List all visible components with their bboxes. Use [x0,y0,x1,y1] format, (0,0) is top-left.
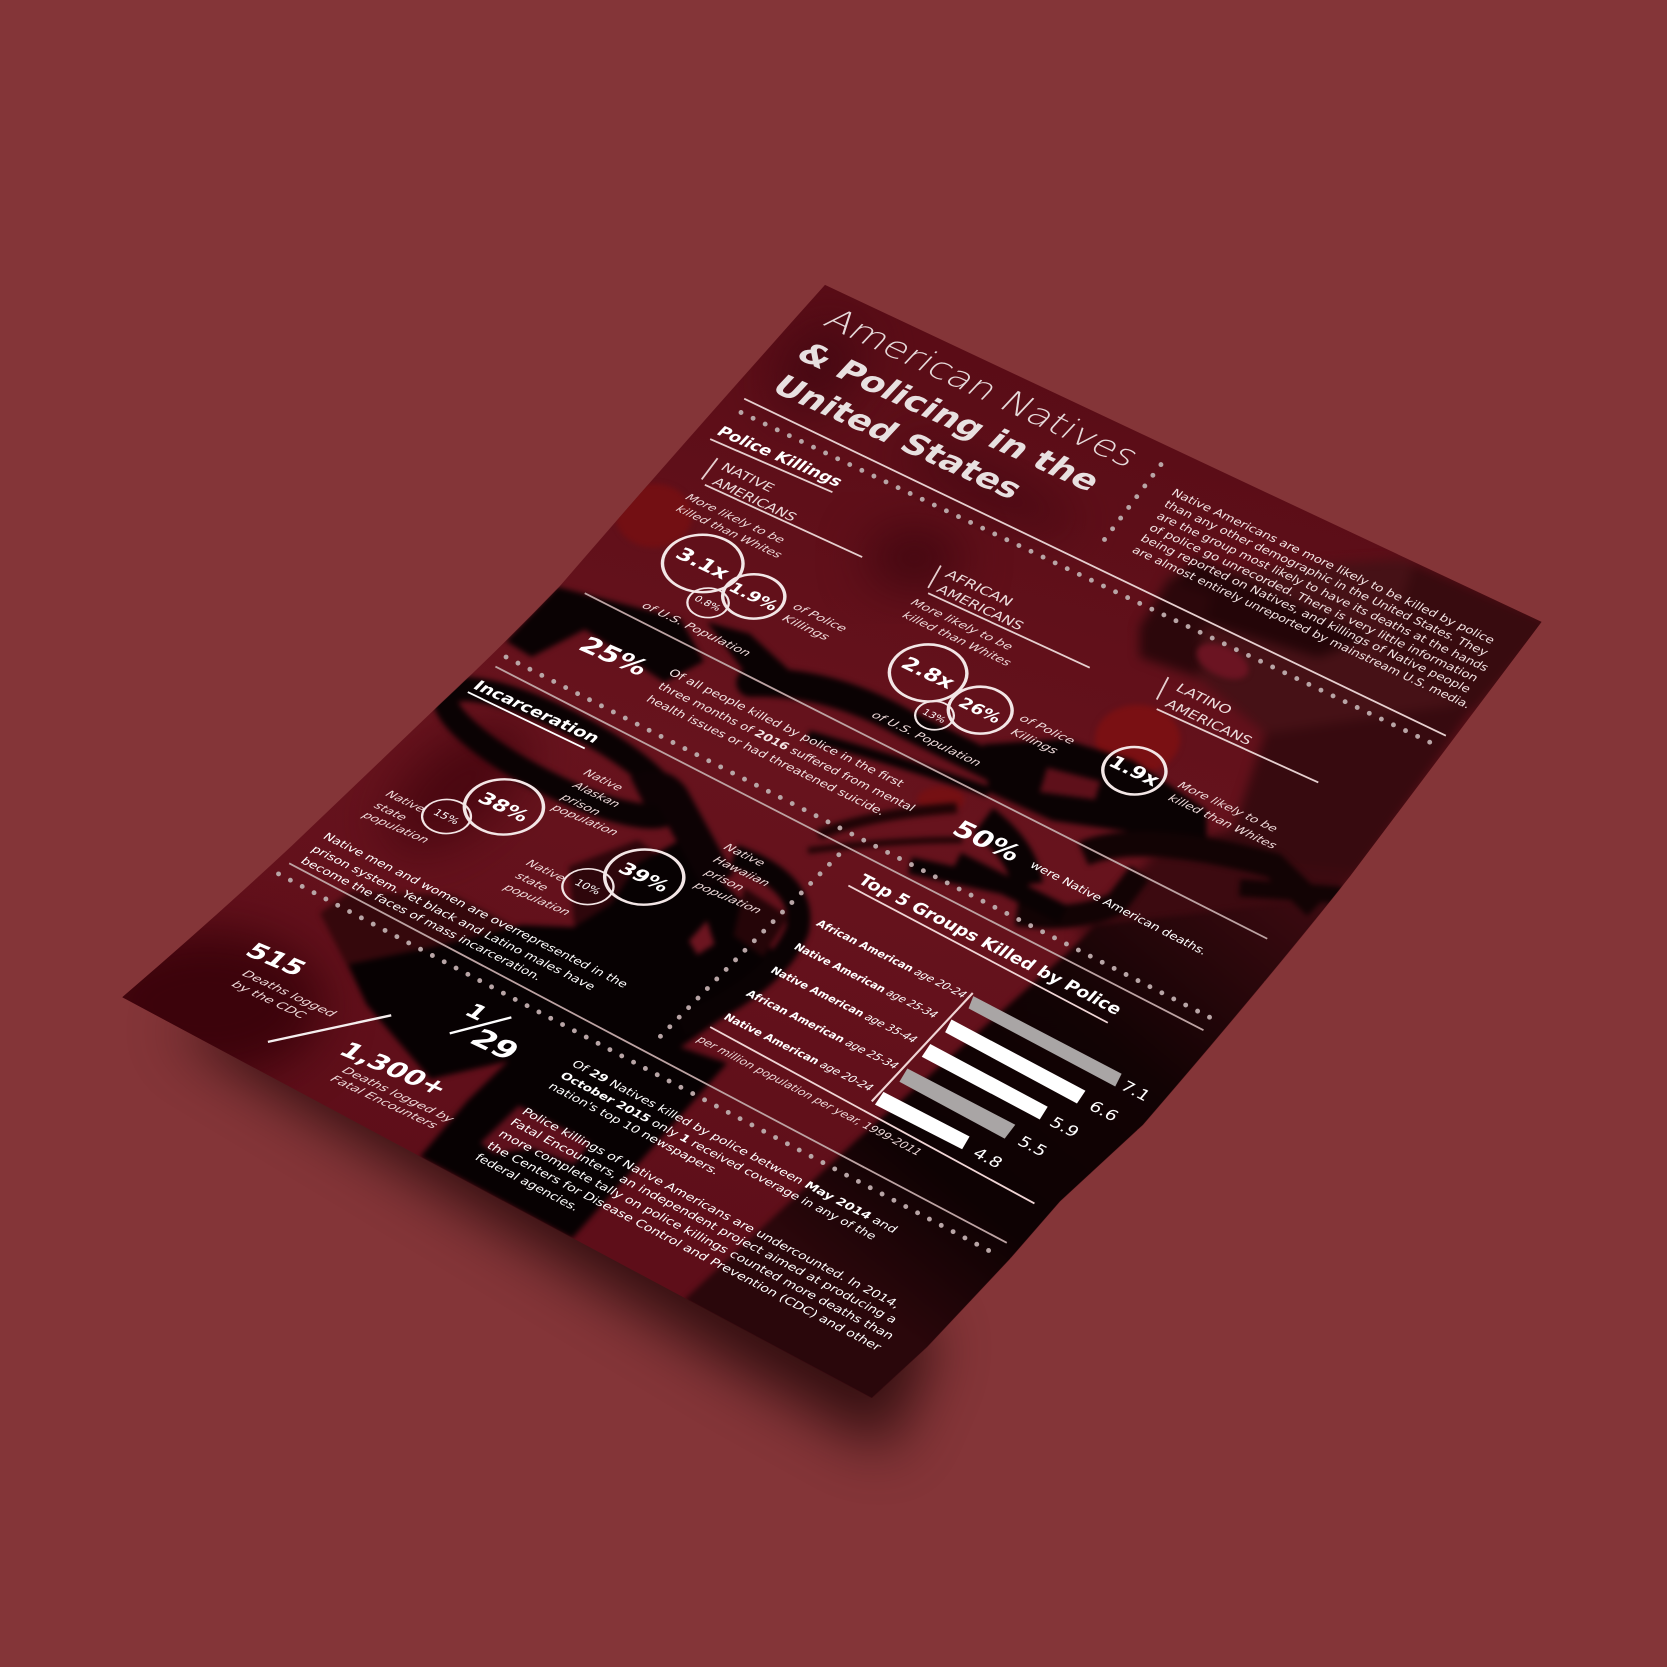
stat: 515 vs 1300 deaths: by the CDC [229,978,310,1021]
panel: native alaskan incarceration [358,767,626,845]
title: American Natives [816,302,1147,474]
intro paragraph: of police go unrecorded. There is very little information [1146,521,1481,684]
callout: 25 percent: health issues or had threatened suicide. [643,693,888,818]
panel: native alaskan incarceration: state [371,800,410,823]
panel: latino americans: LATINO [1172,681,1235,718]
undercount paragraph: federal agencies. [472,1151,582,1213]
panel: latino americans: 1.9x [1104,752,1164,790]
panel: native hawaiian incarceration: 39% [613,858,675,896]
panel: latino americans [1091,677,1318,851]
news coverage paragraph: Of 29 Natives killed by police between May 2014 and [569,1058,901,1235]
panel: african americans: More likely to be [908,596,1016,653]
stat: 515 vs 1300 deaths [229,939,457,1131]
undercount paragraph: more complete tally on police killings counted more deaths than [496,1128,897,1342]
panel: native americans: 1.9% [724,580,782,615]
incarceration paragraph: prison system. Yet black and Latino males have [308,843,598,992]
stat: 515 vs 1300 deaths: Deaths logged by [339,1064,457,1125]
section heading: incarceration: Incarceration [469,678,604,747]
panel: native americans: Killings [779,612,833,643]
panel: native americans: More likely to be [683,491,788,546]
panel: latino americans: AMERICANS [1162,697,1255,748]
panel: native hawaiian incarceration: Native [523,857,569,884]
title divider lines [741,399,1446,747]
chart: top 5 groups killed by police: Native American age 35-44 [768,964,920,1045]
panel: african americans: 13% [920,708,948,725]
chart: top 5 groups killed by police [694,871,1155,1203]
chart: top 5 groups killed by police: Top 5 Groups Killed by Police [854,871,1126,1019]
undercount paragraph: Police killings of Native Americans are undercounted. In 2014, [519,1105,903,1311]
infographic mockup [122,285,1542,1470]
panel: native americans: killed than Whites [673,503,785,560]
panel: african americans: of U.S. Population [869,709,984,769]
panel: african americans: of Police [1017,712,1078,747]
panel: native hawaiian incarceration: 10% [572,877,604,897]
intro paragraph [1129,486,1498,711]
chart: top 5 groups killed by police: Native American age 25-34 [791,941,941,1021]
poster page [122,285,1542,1398]
panel: native americans: AMERICANS [709,476,800,524]
callout: 25 percent [572,632,918,818]
panel: native americans: of Police [790,601,850,634]
chart: top 5 groups killed by police: 6.6 [1085,1097,1123,1125]
panel: native alaskan incarceration: Native [581,767,626,793]
panel: native americans: NATIVE [717,461,777,495]
panel: native hawaiian incarceration: prison [701,866,747,893]
section heading: police killings: Police Killings [712,424,847,490]
panel: native alaskan incarceration: population [358,809,432,845]
panel: african americans: Killings [1008,726,1061,756]
chart: top 5 groups killed by police: African American age 25-34 [743,987,901,1072]
panel: native hawaiian incarceration [500,839,773,918]
callout: 50 percent [946,816,1210,957]
undercount paragraph: Fatal Encounters, an independent project aimed at producing a [507,1116,900,1326]
panel: native alaskan incarceration: 15% [430,807,462,827]
panel: latino americans: More likely to be [1175,779,1281,834]
stat: 1 of 29: 29 [463,1024,526,1066]
chart: top 5 groups killed by police: African American age 20-24 [814,917,970,1001]
panel: native alaskan incarceration: 38% [473,788,535,826]
panel: african americans [869,566,1090,769]
title: United States [764,369,1031,506]
panel: native hawaiian incarceration: Hawaiian [710,854,773,889]
panel: native alaskan incarceration: population [548,801,622,838]
incarceration paragraph: become the faces of mass incarceration. [298,855,545,983]
chart: top 5 groups killed by police: per million population per year, 1999-2011 [694,1033,925,1158]
chart: top 5 groups killed by police: Native American age 20-24 [721,1011,876,1094]
callout: 25 percent: Of all people killed by police in the first [666,667,907,789]
chart: top 5 groups killed by police: 7.1 [1117,1077,1155,1104]
panel: native hawaiian incarceration: population [690,879,765,916]
chain photograph [90,302,1552,1419]
news coverage paragraph: nation's top 10 newspapers. [546,1080,723,1177]
chart: top 5 groups killed by police: 5.5 [1014,1132,1051,1160]
panel: african americans: AFRICAN [942,568,1016,609]
intro paragraph: are almost entirely unreported by mainstream U.S. media. [1129,544,1474,711]
intro paragraph: than any other demographic in the United States. They [1161,498,1491,658]
stat: 515 vs 1300 deaths: Deaths logged [239,968,340,1020]
intro paragraph: Native Americans are more likely to be killed by police [1169,486,1498,646]
panel: native americans: 0.8% [691,594,723,613]
title: & Policing in the [788,336,1109,498]
panel: african americans: 26% [954,695,1005,727]
panel: native alaskan incarceration: prison [557,791,604,818]
stat: 515 vs 1300 deaths: 515 [239,939,312,981]
callout: 25 percent: three months of 2016 suffered from mental [655,680,918,814]
incarceration paragraph: Native men and women are overrepresented in the [320,830,631,990]
panel: native americans [639,458,862,659]
stat: 1 of 29 [450,999,526,1066]
panel: native americans: of U.S. Population [639,600,754,659]
panel: native alaskan incarceration: Alaskan [569,779,623,810]
panel: native americans: 3.1x [671,544,735,583]
intro paragraph: being reported on Natives, and killings of Native people [1138,532,1474,695]
panel: african americans: killed than Whites [900,609,1014,668]
news coverage paragraph: October 2015 only 1 received coverage in any of the [557,1070,880,1242]
chart: top 5 groups killed by police: 5.9 [1046,1113,1083,1141]
panel: native alaskan incarceration: Native [383,788,428,815]
rule [585,593,1267,939]
callout: 50 percent: 50% [946,816,1027,867]
stat: 515 vs 1300 deaths: 1,300+ [333,1038,454,1101]
panel: native hawaiian incarceration: Native [721,841,768,869]
chart: top 5 groups killed by police: 4.8 [969,1144,1007,1171]
panel: latino americans: killed than Whites [1166,792,1280,851]
panel: native hawaiian incarceration: state [513,870,551,893]
section dividers [279,657,1212,1255]
callout: 50 percent: were Native American deaths. [1027,859,1210,957]
stat: 515 vs 1300 deaths: Fatal Encounters [328,1073,441,1131]
stat: 1 of 29: 1 [459,999,494,1025]
intro paragraph: are the group most likely to have its deaths at the hands [1154,510,1491,674]
panel: native hawaiian incarceration: population [500,881,574,918]
page shadow [170,1010,936,1451]
panel: african americans: AMERICANS [933,583,1027,633]
panel: african americans: 2.8x [896,653,960,693]
callout: 25 percent: 25% [572,632,655,681]
undercount paragraph: the Centers for Disease Control and Prevention (CDC) and other [484,1140,884,1353]
